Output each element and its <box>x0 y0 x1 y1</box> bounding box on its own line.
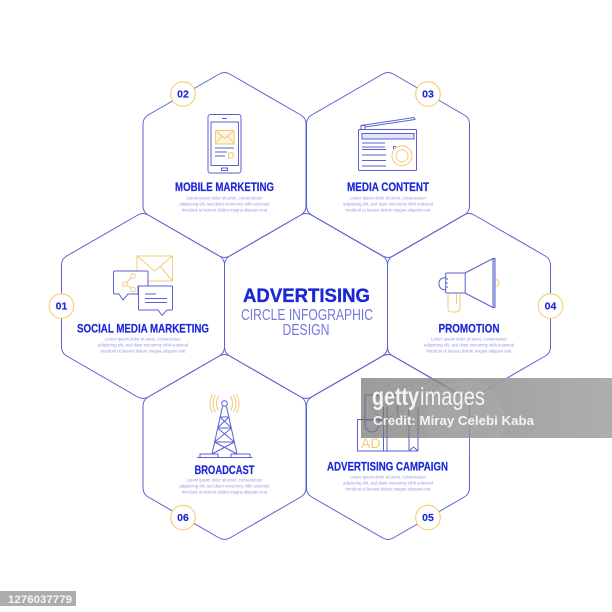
text block: Lorem ipsum dolor sit amet, consectetuer <box>431 336 507 342</box>
text block: tincidunt ut laoreet dolore magna aliquam erat <box>100 348 186 354</box>
image id tag: 1276037779 <box>8 594 72 606</box>
panel: social media marketing <box>77 256 209 354</box>
watermark banner <box>361 378 612 460</box>
watermark banner: images <box>420 383 485 411</box>
text block: adipiscing elit, sed diam nonummy nibh euismod <box>180 202 270 206</box>
text block: Lorem ipsum dolor sit amet, consectetuer <box>186 478 263 482</box>
number badge 05 <box>416 505 440 530</box>
number badge 04: 04 <box>545 301 556 313</box>
text block <box>343 196 433 212</box>
panel: promotion <box>424 258 514 354</box>
text block: adipiscing elit, sed diam nonummy nibh euismod <box>343 480 433 486</box>
icon: radio tower <box>197 394 252 458</box>
heading: PROMOTION <box>438 324 500 336</box>
panel: mobile marketing <box>175 114 274 212</box>
icon: billboard and newspaper: AD <box>361 435 380 451</box>
icon: megaphone <box>439 258 499 312</box>
number badge 05: 05 <box>422 512 434 524</box>
image id tag <box>0 591 76 606</box>
watermark banner: Credit: Miray Celebi Kaba <box>373 413 535 428</box>
text block <box>180 196 270 212</box>
heading: MEDIA CONTENT <box>347 182 429 194</box>
number badge 06: 06 <box>177 512 189 524</box>
number badge 06 <box>171 505 195 530</box>
heading: MOBILE MARKETING <box>175 182 274 194</box>
heading: BROADCAST <box>194 465 254 477</box>
text block <box>98 336 188 354</box>
text block <box>343 474 433 492</box>
text block <box>424 336 514 354</box>
number badge 03: 03 <box>422 89 434 101</box>
text block <box>180 478 270 494</box>
number badge 04 <box>538 294 563 318</box>
text block: adipiscing elit, sed diam nonummy nibh euismod <box>180 484 270 488</box>
number badge 02: 02 <box>177 89 189 101</box>
number badge 02 <box>171 82 195 106</box>
text block: adipiscing elit, sed diam nonummy nibh euismod <box>343 202 433 206</box>
text block: adipiscing elit, sed diam nonummy nibh euismod <box>424 342 514 348</box>
panel: advertising campaign <box>327 394 448 492</box>
text block: Lorem ipsum dolor sit amet, consectetuer <box>186 196 263 200</box>
panel: media content <box>343 118 433 212</box>
text block: Lorem ipsum dolor sit amet, consectetuer <box>350 196 426 200</box>
hexagon grid <box>62 72 550 540</box>
heading: ADVERTISING CAMPAIGN <box>327 462 448 474</box>
text block: adipiscing elit, sed diam nonummy nibh euismod <box>98 342 188 348</box>
heading: SOCIAL MEDIA MARKETING <box>77 324 209 336</box>
panel: broadcast <box>180 394 270 494</box>
text block: tincidunt ut laoreet dolore magna aliquam erat <box>182 490 268 494</box>
title: CIRCLE INFOGRAPHIC <box>241 307 373 324</box>
text block: tincidunt ut laoreet dolore magna aliquam erat <box>346 208 431 212</box>
text block: tincidunt ut laoreet dolore magna aliquam erat <box>426 348 512 354</box>
text block: Lorem ipsum dolor sit amet, consectetuer <box>105 336 181 342</box>
watermark banner: getty <box>372 383 419 411</box>
title: ADVERTISING <box>243 286 370 307</box>
number badge 03 <box>416 82 440 106</box>
title <box>241 286 373 339</box>
number badge 01 <box>49 294 74 318</box>
title: DESIGN <box>282 322 330 339</box>
text block: tincidunt ut laoreet dolore magna aliquam erat <box>182 208 268 212</box>
number badge 01: 01 <box>56 301 67 313</box>
text block: Lorem ipsum dolor sit amet, consectetuer <box>350 474 426 480</box>
icon: smartphone <box>208 114 241 173</box>
icon: radio <box>358 118 416 170</box>
icon: chat bubbles and envelope <box>114 256 172 316</box>
text block: tincidunt ut laoreet dolore magna aliquam erat <box>346 486 431 492</box>
